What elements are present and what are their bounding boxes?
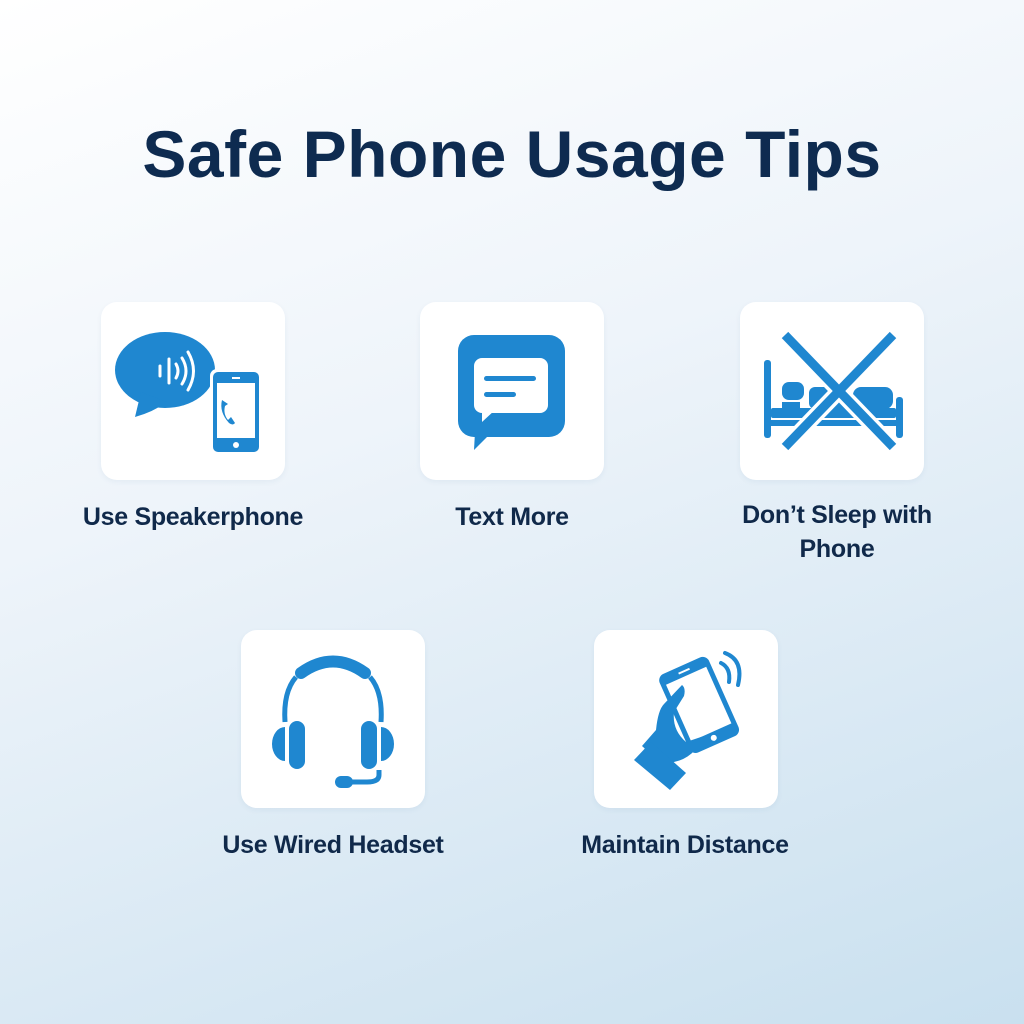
icon: crossed bed <box>764 332 903 450</box>
card: use speakerphone <box>101 302 285 480</box>
label: use speakerphone: Use Speakerphone <box>83 503 303 531</box>
icon: speech bubble and phone <box>115 332 259 452</box>
icon: message bubble <box>458 335 565 450</box>
card: text more <box>420 302 604 480</box>
icon: headset <box>272 656 394 788</box>
label: don't sleep with phone <box>742 501 932 563</box>
label: don't sleep with phone: Phone <box>800 535 874 563</box>
title: Safe Phone Usage Tips <box>142 117 882 191</box>
card: use wired headset <box>241 630 425 808</box>
label: use wired headset: Use Wired Headset <box>222 831 444 859</box>
label: text more: Text More <box>455 503 569 531</box>
card: don't sleep with phone <box>740 302 924 480</box>
label: maintain distance: Maintain Distance <box>581 831 789 859</box>
icon: hand holding phone <box>634 650 742 790</box>
label: don't sleep with phone: Don’t Sleep with <box>742 501 932 529</box>
card: maintain distance <box>594 630 778 808</box>
